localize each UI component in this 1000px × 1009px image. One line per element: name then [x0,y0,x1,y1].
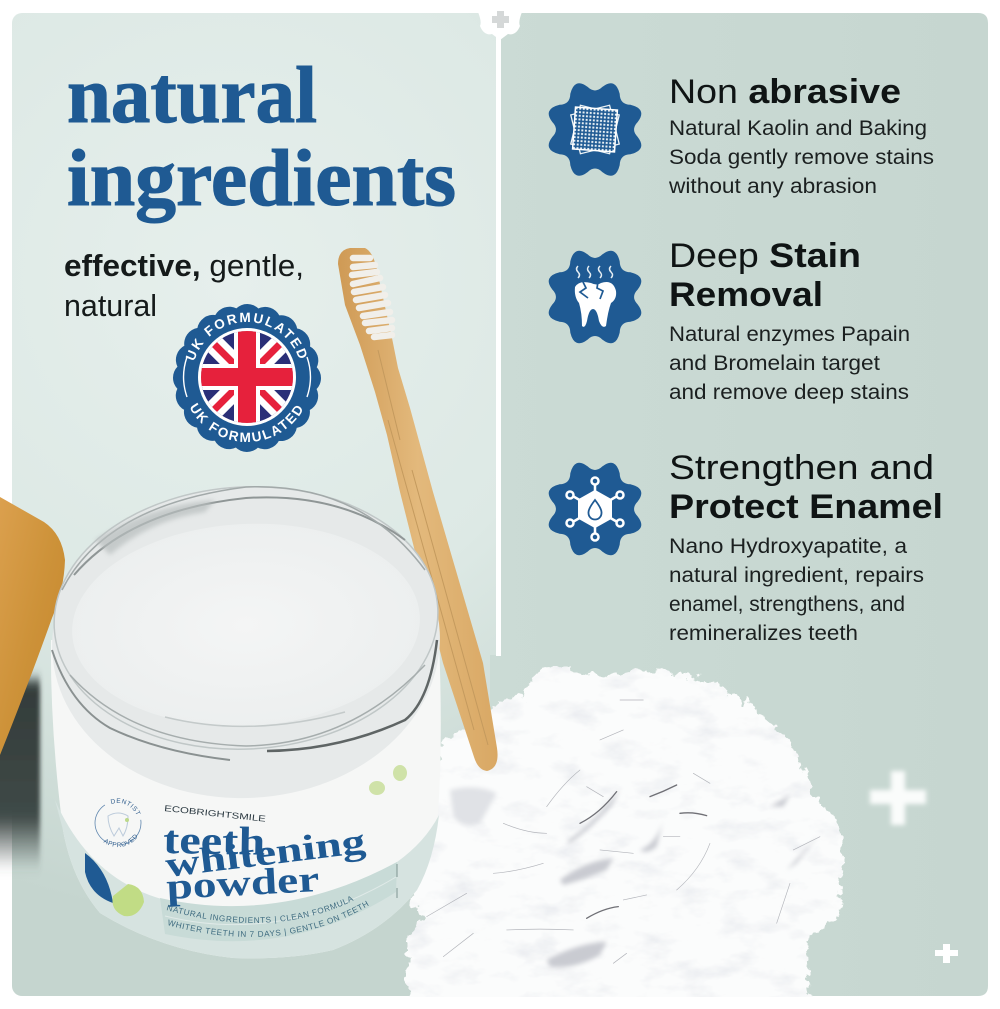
powder surface [67,515,425,735]
text: strengthen enamel: Nano Hydroxyapatite, a [669,534,907,558]
title: natural [67,52,317,140]
jar rim [47,477,445,759]
icon: union flag [200,330,294,424]
product name: powder [165,859,320,908]
sparkle: small plus [935,944,958,963]
jar lower clear base [55,800,439,958]
text: strengthen enamel: remineralizes teeth [669,621,858,645]
wooden lid [0,497,65,755]
powder pile [408,665,842,1005]
title [67,52,456,223]
heading: deep stain removal: Removal [669,276,823,314]
text: deep stain removal [669,322,910,404]
panel: left background [12,13,498,996]
green leaf [112,884,144,916]
heading: non abrasive: Non abrasive [669,73,901,111]
label claims: NATURAL INGREDIENTS | CLEAN FORMULA [166,896,354,924]
text: deep stain removal: and Bromelain target [669,351,880,375]
icon: strengthen enamel [550,464,640,554]
jar neck [44,476,448,808]
powder soft smears [450,787,820,967]
bristles [352,258,392,337]
seal badge: APPROVED [104,834,137,848]
icon: deep stain removal [550,252,640,342]
sparkle: blurred plus [870,771,926,825]
text: non abrasive: Natural Kaolin and Baking [669,116,927,140]
title: ingredients [67,135,456,223]
heading: strengthen enamel [669,449,943,526]
blue leaf [85,853,113,903]
badge: UK formulated: UK FORMULATED [190,402,302,442]
seal badge: DENTIST [110,798,141,814]
subtitle: natural [64,288,157,323]
badge: UK formulated: UK FORMULATED [186,312,306,360]
text: deep stain removal: Natural enzymes Papain [669,322,910,346]
lid shadow [0,680,40,870]
badge: UK formulated [173,304,321,452]
text: non abrasive: Soda gently remove stains [669,145,934,169]
divider notch with plus [478,11,522,656]
jar [51,486,441,958]
icon: non abrasive [550,84,640,175]
product name: whitening [163,821,367,885]
brand name: ECOBRIGHTSMILE [164,803,267,824]
label claims: WHITER TEETH IN 7 DAYS | GENTLE ON TEETH [168,900,369,937]
heading: strengthen enamel: Protect Enamel [669,488,943,526]
text: non abrasive: without any abrasion [668,174,877,198]
powder cracks [427,700,820,963]
panel: right background [490,13,988,996]
text: strengthen enamel [669,534,924,645]
heading: strengthen enamel: Strengthen and [669,449,934,487]
jar body [51,640,441,958]
seal badge [94,798,142,848]
green marks [369,765,407,795]
toothbrush [338,248,498,771]
text: deep stain removal: and remove deep stains [669,380,909,404]
text: non abrasive [668,116,934,198]
subtitle: effective, gentle, [64,248,304,283]
heading: deep stain removal [669,237,861,314]
label band [160,862,397,941]
heading: deep stain removal: Deep Stain [669,237,861,275]
subtitle [64,248,304,323]
product name: teeth [163,817,266,864]
product name [163,817,367,908]
text: strengthen enamel: enamel, strengthens, and [669,592,905,616]
text: strengthen enamel: natural ingredient, repairs [669,563,924,587]
